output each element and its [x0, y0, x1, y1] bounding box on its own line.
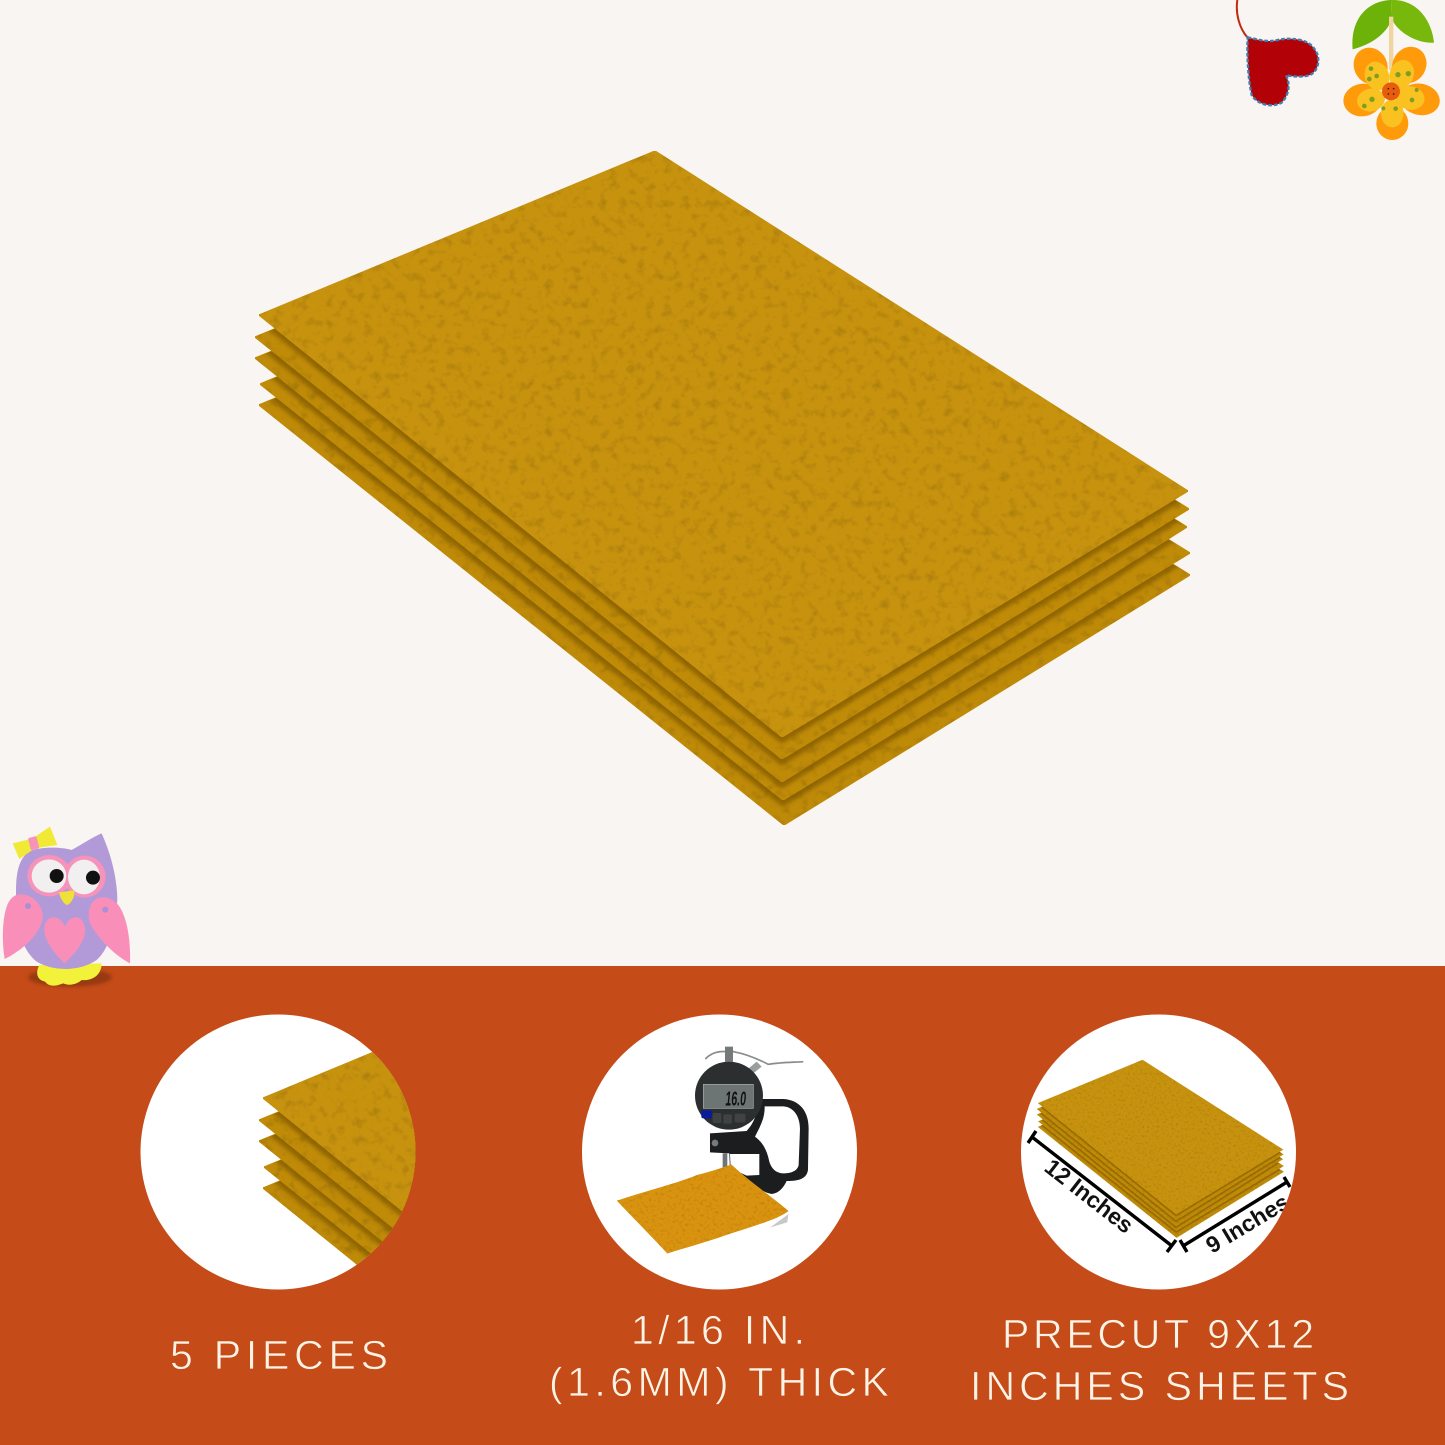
screen [703, 1084, 753, 1108]
caption: PRECUT 9X12 [1002, 1311, 1314, 1357]
screw [712, 1140, 718, 1146]
caption: 1/16 IN. [631, 1307, 805, 1353]
owl eyes [27, 855, 71, 896]
icon: felt owl [3, 827, 130, 987]
miniature stack [1037, 1060, 1284, 1238]
icon: red felt heart on string [1237, 0, 1318, 105]
thickness gauge illustration [617, 1047, 809, 1254]
blue button [701, 1110, 712, 1118]
frame cut-out [755, 1106, 800, 1173]
dial [695, 1062, 763, 1130]
leaves [1352, 0, 1392, 49]
dimension diagram [1028, 1060, 1293, 1258]
bottom feature band [0, 966, 1445, 1445]
stack close-up [259, 1052, 416, 1265]
felt sheet stack: five mustard sheets [255, 151, 1190, 825]
owl bow [13, 827, 57, 859]
dial buttons [713, 1113, 721, 1123]
white circle [140, 1014, 416, 1290]
panel: sheet size [970, 1014, 1349, 1409]
stem [1389, 17, 1393, 70]
9 inches label: 9 Inches [1201, 1189, 1293, 1258]
owl wings [3, 894, 43, 959]
owl beak [59, 890, 74, 905]
9 inch dimension line [1180, 1177, 1290, 1252]
panel: 5 pieces [140, 1014, 420, 1378]
string [1237, 0, 1247, 37]
12 inch dimension line [1028, 1131, 1176, 1252]
sheet shadow [770, 1214, 788, 1228]
gauge lever [705, 1048, 803, 1064]
white circle [1021, 1014, 1296, 1290]
icon: felt flower with leaves [1341, 0, 1443, 140]
reading: 16.0 [725, 1088, 746, 1111]
inner petals [1355, 56, 1426, 127]
flower button [1382, 82, 1400, 100]
panel: thickness [549, 1014, 889, 1405]
owl feet [37, 963, 102, 986]
owl wing buttons [25, 903, 31, 909]
spindle [723, 1153, 727, 1167]
gauge frame [710, 1099, 809, 1194]
12 inches label: 12 Inches [1040, 1153, 1139, 1238]
felt sample [617, 1164, 789, 1254]
white circle [582, 1014, 857, 1290]
owl heart [44, 917, 85, 963]
caption: 5 PIECES [170, 1332, 388, 1378]
heart [1247, 37, 1318, 105]
panel: sheet size: INCHES SHEETS [970, 1363, 1349, 1409]
panel: thickness: (1.6MM) THICK [549, 1359, 889, 1405]
owl body [16, 833, 117, 969]
outer petals [1341, 40, 1443, 140]
petal dots [1362, 66, 1419, 111]
owl shadow [28, 968, 112, 987]
